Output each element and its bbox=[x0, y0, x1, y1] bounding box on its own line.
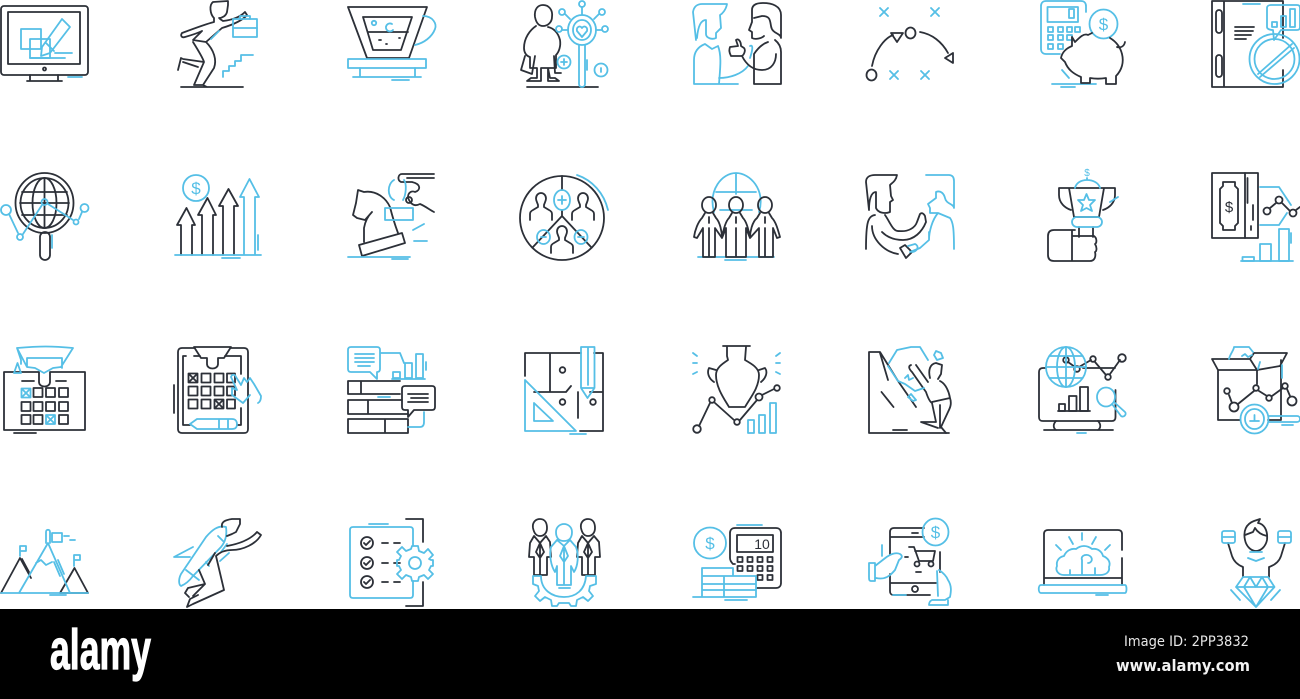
icon: laptop with brain bbox=[1039, 530, 1126, 595]
website url: www.alamy.com bbox=[1116, 656, 1250, 675]
icon: man running up stairs with briefcase bbox=[178, 1, 257, 87]
footer bar bbox=[0, 609, 1300, 699]
icon: calculator and piggy bank bbox=[1041, 1, 1125, 87]
icon: climber on rock face bbox=[869, 347, 951, 433]
icon: mountains with flags bbox=[1, 530, 88, 595]
icon: monitor with design tools bbox=[1, 6, 88, 81]
icon: hand holding trophy: $ bbox=[1084, 168, 1090, 179]
icon: person holding diamond bbox=[1222, 519, 1291, 607]
icon: rising arrows with dollar coin bbox=[175, 175, 261, 258]
icon: checklist with gear bbox=[350, 519, 433, 606]
image id: Image ID: 2PP3832 bbox=[1124, 634, 1249, 650]
icon: tablet calendar with hand bbox=[174, 347, 261, 433]
icon: two men shaking hands bbox=[866, 175, 954, 258]
icon: amphora with growth line bbox=[693, 346, 780, 433]
icon: screen with globe and analytics bbox=[1039, 347, 1126, 433]
icon: shopper and magnifier with heart bbox=[521, 1, 608, 87]
icon: open box with chart and magnifier bbox=[1212, 347, 1300, 434]
icon: team circle diagram bbox=[520, 175, 608, 260]
icon: tablet with cart and coin bbox=[869, 518, 951, 605]
icon: two men talking bbox=[693, 3, 781, 84]
logo: alamy: alamy bbox=[50, 618, 151, 682]
icon: coin, calculator and cash stack: 10 bbox=[754, 536, 770, 552]
icon: three businessmen with globe bbox=[694, 173, 780, 260]
icon: binder with forbidden sign bbox=[1212, 1, 1300, 87]
icon: money note and chart: $ bbox=[1225, 199, 1234, 216]
icon: rising arrows with dollar coin: $ bbox=[191, 179, 201, 198]
icon: money note and chart bbox=[1212, 173, 1300, 261]
icon: tablet with cart and coin: $ bbox=[931, 523, 941, 542]
icon: brick wall with speech bubbles bbox=[348, 347, 435, 433]
icon: floor plan with set square and pencil bbox=[525, 347, 603, 434]
icon: man with rocket on back bbox=[174, 519, 261, 607]
icon: calculator and piggy bank: $ bbox=[1099, 15, 1109, 34]
icon: hand moving chess knight bbox=[348, 174, 434, 259]
icon: team and gear bbox=[529, 519, 600, 606]
icon: globe under magnifier with trend line bbox=[1, 173, 88, 260]
icon: coin, calculator and cash stack bbox=[693, 525, 781, 600]
icon: coin, calculator and cash stack: $ bbox=[705, 534, 715, 553]
icon: graduation cap on calendar bbox=[4, 346, 85, 433]
icon: hand holding trophy bbox=[1048, 168, 1118, 261]
icon: coffee filter dripper bbox=[348, 7, 436, 80]
icon: strategy play diagram bbox=[866, 8, 953, 80]
